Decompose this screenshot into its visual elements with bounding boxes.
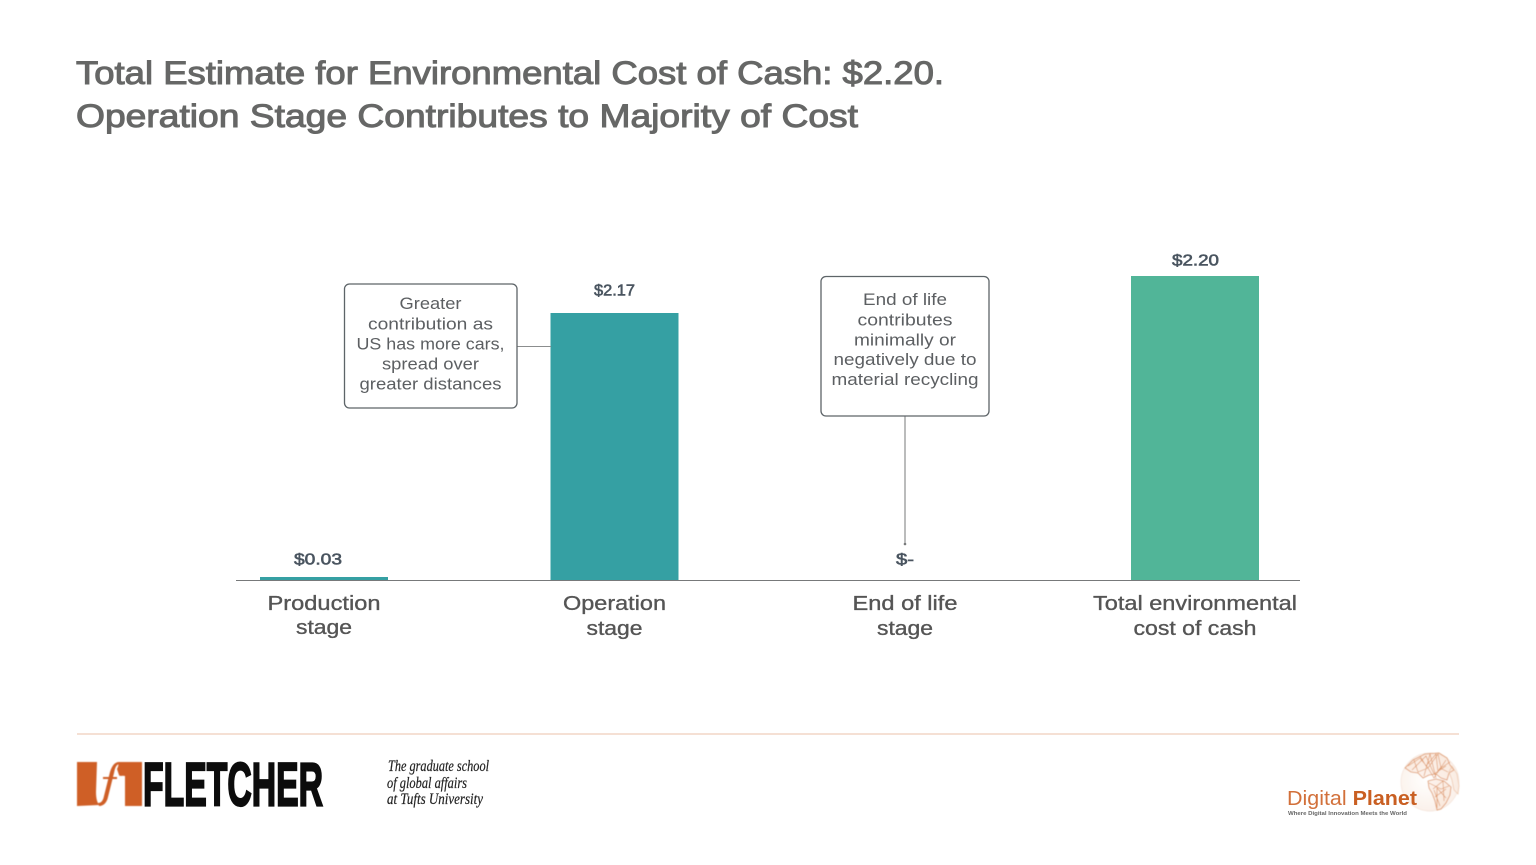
callout: end of life: End of life: [863, 291, 947, 309]
callout: operation stage: contribution as: [368, 316, 493, 334]
callout: end of life: minimally or: [854, 332, 957, 350]
category labels: stage: [586, 618, 642, 640]
category labels: [268, 593, 1297, 640]
wordmark: FLETCHER: [143, 750, 323, 818]
callout: end of life: negatively due to: [834, 351, 976, 369]
wordmark: Digital Planet: [1287, 787, 1417, 810]
callout: end of life: contributes: [858, 312, 952, 330]
tagline: Where Digital Innovation Meets the World: [1288, 811, 1407, 817]
callout: end of life: material recycling: [832, 371, 978, 389]
title: [76, 55, 944, 134]
category labels: stage: [877, 618, 933, 640]
icon: orange lf mark: [77, 762, 142, 806]
callout: operation stage: [344, 284, 551, 408]
category labels: End of life: [852, 593, 958, 615]
logo: Fletcher: [77, 750, 323, 818]
bar chart: [236, 252, 1300, 640]
category labels: Production: [268, 593, 380, 615]
callout: operation stage: Greater: [400, 295, 462, 313]
chart baseline: [236, 580, 1300, 582]
category labels: Total environmental: [1093, 593, 1297, 615]
footer rule: [77, 733, 1459, 735]
value labels: $0.03: [294, 552, 342, 568]
icon: wireframe globe: [1401, 753, 1459, 811]
text: graduate school tagline: of global affairs: [387, 775, 467, 792]
text: graduate school tagline: at Tufts University: [387, 791, 484, 808]
logo: Digital Planet: [1287, 753, 1459, 817]
callout: operation stage: US has more cars,: [356, 336, 504, 354]
callout: operation stage: spread over: [382, 356, 480, 374]
value labels: $-: [896, 552, 914, 568]
text: graduate school tagline: The graduate school: [388, 758, 489, 775]
title: Operation Stage Contributes to Majority of Cost: [76, 98, 858, 134]
value labels: [294, 252, 1219, 568]
category labels: Operation: [563, 593, 666, 615]
callout: operation stage: greater distances: [360, 376, 502, 394]
value labels: $2.20: [1172, 252, 1219, 270]
callout: end of life: [821, 276, 989, 545]
bar: production stage: [260, 577, 388, 580]
category labels: cost of cash: [1134, 618, 1256, 640]
text: graduate school tagline: [387, 758, 489, 808]
bar: total environmental cost of cash: [1131, 276, 1259, 580]
value labels: $2.17: [594, 282, 635, 300]
category labels: stage: [296, 617, 352, 639]
title: Total Estimate for Environmental Cost of Cash: $2.20.: [76, 55, 944, 91]
bar: operation stage: [550, 313, 678, 580]
